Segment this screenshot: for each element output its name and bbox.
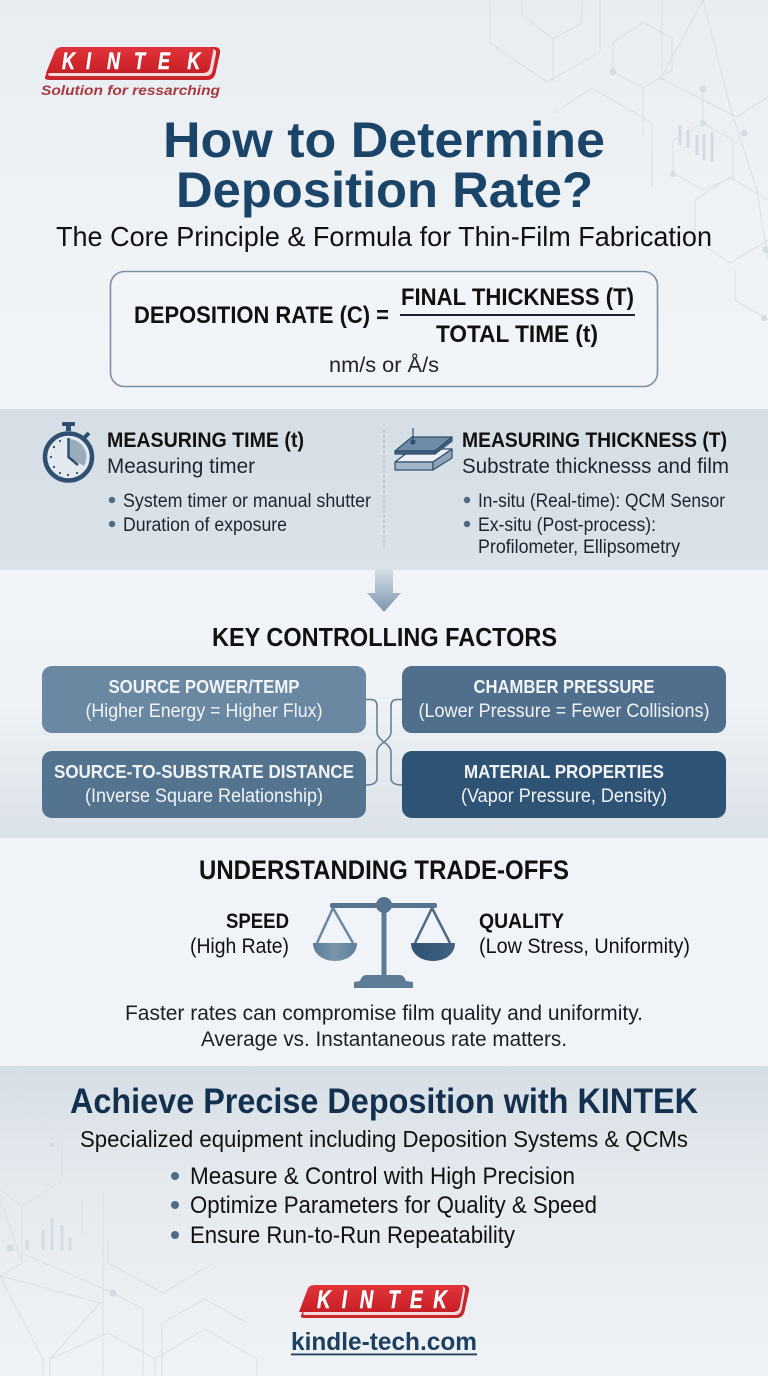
card: material properties: MATERIAL PROPERTIES — [464, 761, 664, 782]
bullets: benefits: Measure & Control with High Precision — [190, 1163, 575, 1190]
label: speed: (High Rate) — [190, 935, 289, 958]
heading: measuring time: MEASURING TIME (t) — [107, 429, 304, 452]
text: trade-off note: Faster rates can compromise film quality and uniformity. — [125, 1001, 643, 1025]
logo: KINTEK top: Solution for ressarching — [41, 82, 220, 98]
logo: KINTEK top: KINTEK — [62, 49, 202, 75]
bullets: thickness: Ex-situ (Post-process): — [478, 515, 656, 536]
card: distance — [42, 751, 366, 818]
heading: call to action: Achieve Precise Deposition with KINTEK — [70, 1082, 698, 1121]
formula left side: DEPOSITION RATE (C) = — [134, 302, 389, 329]
title: How to Determine — [163, 112, 605, 168]
panel: formula — [110, 272, 658, 386]
formula denominator: TOTAL TIME (t) — [436, 321, 598, 348]
heading: measuring thickness: MEASURING THICKNESS (T) — [462, 429, 727, 452]
title — [163, 112, 605, 218]
bullets: thickness: In-situ (Real-time): QCM Sensor — [478, 491, 726, 512]
text: trade-off note — [125, 1001, 643, 1051]
heading: understanding trade-offs: UNDERSTANDING TRADE-OFFS — [199, 855, 569, 885]
icon: substrate and film — [395, 428, 452, 470]
link: website: kindle-tech.com — [291, 1328, 477, 1356]
card: material properties — [402, 751, 726, 818]
label: speed: SPEED — [226, 910, 289, 933]
label: speed — [190, 910, 289, 958]
arrow: down — [367, 570, 401, 612]
bullets: benefits — [171, 1163, 597, 1249]
card: distance: SOURCE-TO-SUBSTRATE DISTANCE — [54, 761, 354, 782]
panel: measurement band — [0, 409, 768, 570]
text: substrate thickness: Substrate thicknesss and film — [462, 455, 729, 478]
card: source power: SOURCE POWER/TEMP — [108, 676, 300, 697]
subtitle: The Core Principle & Formula for Thin-Film Fabrication — [56, 221, 712, 252]
bullets: thickness: Profilometer, Ellipsometry — [478, 537, 680, 558]
card: chamber pressure — [402, 666, 726, 733]
card: chamber pressure: (Lower Pressure = Fewer Collisions) — [418, 701, 710, 722]
bullets: time: Duration of exposure — [123, 515, 287, 536]
bullets: time — [109, 491, 372, 536]
bullets: thickness — [464, 491, 726, 558]
connector lines — [366, 700, 402, 785]
logo: KINTEK bottom — [299, 1285, 469, 1318]
card: source power — [42, 666, 366, 733]
text: measuring timer: Measuring timer — [107, 455, 255, 478]
logo: KINTEK bottom: KINTEK — [317, 1285, 449, 1314]
bullets: benefits: Optimize Parameters for Quality & Speed — [190, 1192, 597, 1219]
label: quality — [479, 910, 690, 958]
text: trade-off note: Average vs. Instantaneous rate matters. — [201, 1027, 567, 1051]
text: equipment line: Specialized equipment including Deposition Systems & QCMs — [80, 1126, 688, 1152]
icon: balance scale — [313, 897, 455, 988]
formula units: nm/s or Å/s — [329, 354, 439, 377]
card: source power: (Higher Energy = Higher Flux) — [86, 701, 322, 722]
heading: key controlling factors: KEY CONTROLLING FACTORS — [212, 622, 557, 652]
label: quality: (Low Stress, Uniformity) — [479, 935, 690, 958]
logo: KINTEK top — [41, 47, 220, 98]
icon: stopwatch — [45, 422, 92, 480]
card: material properties: (Vapor Pressure, Density) — [461, 786, 667, 807]
title: Deposition Rate? — [176, 162, 593, 218]
bullets: time: System timer or manual shutter — [123, 491, 372, 512]
card: distance: (Inverse Square Relationship) — [85, 786, 323, 807]
card: chamber pressure: CHAMBER PRESSURE — [474, 676, 654, 697]
label: quality: QUALITY — [479, 910, 564, 933]
bullets: benefits: Ensure Run-to-Run Repeatability — [190, 1222, 515, 1249]
formula numerator: FINAL THICKNESS (T) — [401, 284, 634, 311]
